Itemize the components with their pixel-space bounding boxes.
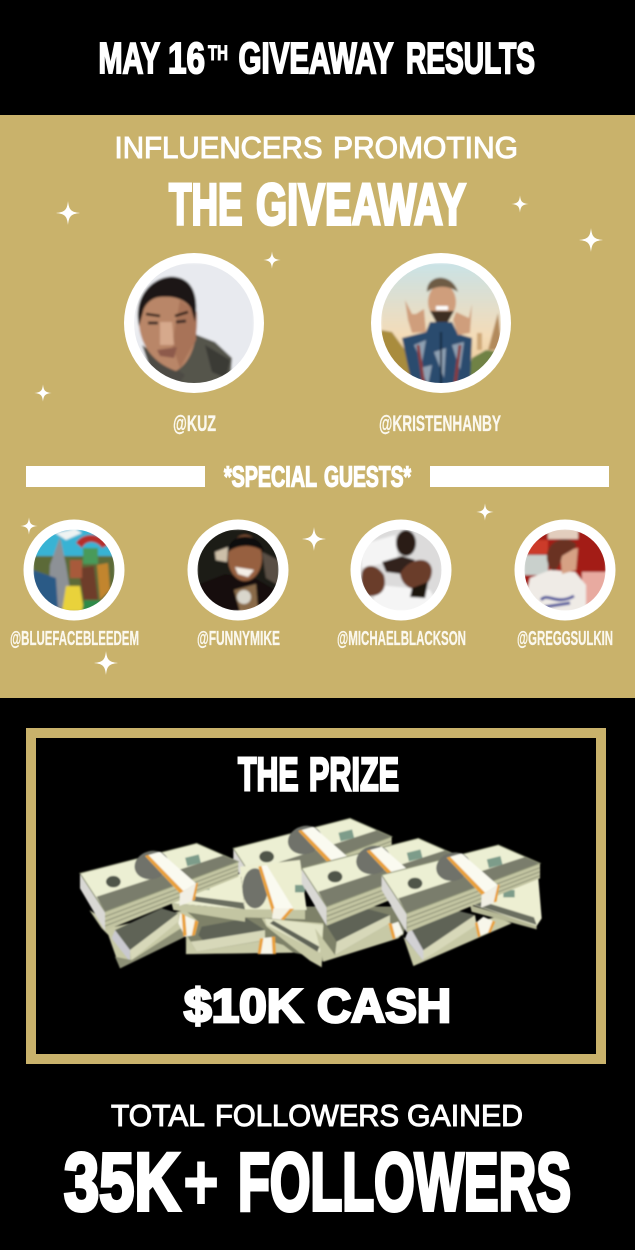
heading: the prize: PRIZE — [309, 748, 399, 801]
stat: 35k followers: 35K — [64, 1137, 180, 1228]
lower center-right stack — [315, 923, 403, 962]
right rear stack — [470, 905, 537, 929]
avatar: greggsulkin — [514, 520, 616, 620]
sparkles — [20, 195, 603, 675]
header band — [0, 0, 635, 115]
prize amount: $10K — [184, 980, 302, 1033]
avatar: kristenhanby — [371, 253, 511, 393]
front stacks — [302, 838, 460, 926]
title: TH — [208, 42, 228, 65]
title: MAY — [98, 35, 160, 83]
heading: the giveaway: GIVEAWAY — [256, 172, 466, 238]
divider: right bar — [430, 466, 609, 487]
top back stack — [233, 818, 392, 906]
heading: the prize — [238, 748, 399, 801]
heading: total followers gained: FOLLOWERS — [215, 1099, 399, 1133]
avatar: michaelblackson — [350, 520, 452, 620]
lower center stack — [262, 918, 323, 967]
avatar: bluefacebleedem — [24, 520, 124, 620]
heading: the prize: THE — [238, 748, 298, 801]
lower left stack — [89, 910, 198, 968]
center stack — [245, 909, 305, 919]
panel: influencers — [0, 115, 635, 698]
stat: 35k followers: + — [183, 1137, 219, 1228]
heading: special guests: GUESTS* — [324, 461, 412, 493]
lower right stack — [403, 917, 512, 966]
divider: left bar — [26, 466, 205, 487]
stat: 35k followers — [64, 1137, 571, 1228]
title: RESULTS — [406, 35, 535, 83]
left rear stack — [172, 903, 245, 922]
heading: influencers promoting: INFLUENCERS — [114, 131, 322, 165]
stack underlay — [185, 907, 410, 962]
heading: the giveaway: THE — [169, 172, 242, 238]
heading: influencers promoting: PROMOTING — [333, 131, 518, 165]
illustration: stacks of cash — [80, 818, 542, 968]
title: 16 — [168, 35, 205, 83]
heading: the giveaway — [169, 172, 466, 238]
handle: funnymike: @FUNNYMIKE — [197, 627, 280, 650]
title: GIVEAWAY — [238, 35, 394, 83]
heading: total followers gained — [111, 1099, 523, 1133]
lower mid stack — [186, 935, 293, 954]
handle: bluefacebleedem: @BLUEFACEBLEEDEM — [10, 627, 139, 650]
title — [98, 35, 535, 83]
avatar: kuz — [124, 253, 264, 393]
panel: the prize — [31, 733, 601, 1059]
heading: influencers promoting — [114, 131, 518, 165]
avatar: funnymike — [188, 520, 288, 620]
heading: total followers gained: GAINED — [407, 1099, 523, 1133]
prize amount: CASH — [317, 980, 451, 1033]
prize amount — [184, 980, 451, 1033]
heading: special guests: *SPECIAL — [224, 461, 317, 493]
handle: kuz: @KUZ — [173, 411, 216, 436]
handle: michaelblackson: @MICHAELBLACKSON — [337, 627, 466, 650]
handle: kristenhanby: @KRISTENHANBY — [379, 411, 501, 436]
heading: total followers gained: TOTAL — [111, 1099, 205, 1133]
